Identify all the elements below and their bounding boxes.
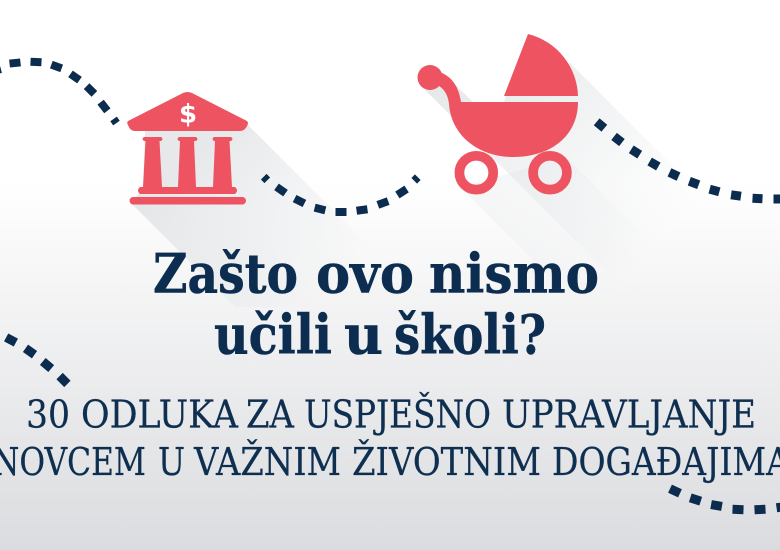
subtitle: UPRAVLJANJE xyxy=(502,392,756,436)
icon: dollar sign: $ xyxy=(179,100,197,130)
shadow: pram body xyxy=(425,63,780,293)
title: u xyxy=(344,302,383,366)
icon: pram wheels xyxy=(459,156,567,190)
dashed line: lower right xyxy=(668,485,780,514)
dashed line: top left xyxy=(0,58,120,125)
subtitle: ODLUKA xyxy=(81,392,239,436)
title: ovo xyxy=(316,242,414,306)
title: nismo xyxy=(429,242,599,306)
title: Zašto xyxy=(153,242,298,306)
dashed line: middle xyxy=(261,174,421,216)
shadow: pram wheels xyxy=(460,156,702,293)
icon: bank xyxy=(127,92,248,204)
shadow: bank xyxy=(130,125,430,307)
subtitle xyxy=(0,392,780,484)
subtitle: ŽIVOTNIM xyxy=(352,440,541,484)
title: školi? xyxy=(394,302,546,366)
dashed line: lower left xyxy=(4,333,71,387)
icon: pram xyxy=(418,34,578,157)
subtitle: U xyxy=(158,440,185,484)
subtitle: USPJEŠNO xyxy=(304,392,491,436)
title xyxy=(153,242,599,366)
dashed line: right xyxy=(594,118,780,204)
subtitle: ZA xyxy=(246,392,294,436)
subtitle: VAŽNIM xyxy=(193,440,341,484)
subtitle: 30 xyxy=(26,392,70,436)
title: učili xyxy=(214,302,332,366)
